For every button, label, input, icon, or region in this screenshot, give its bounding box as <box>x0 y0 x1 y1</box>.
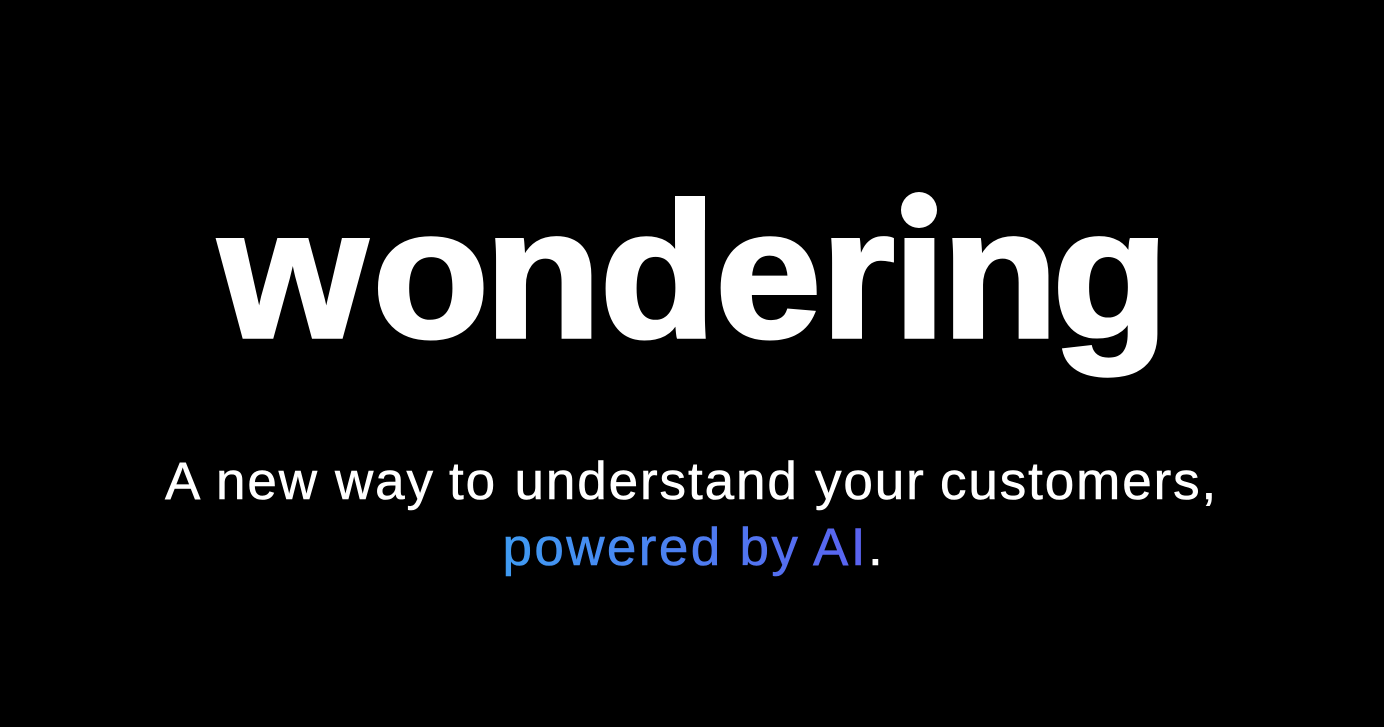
tagline line 1 <box>165 452 1218 511</box>
tagline line 1: to <box>449 452 497 511</box>
tagline line 2: AI <box>813 518 868 577</box>
tagline line 1: way <box>334 452 435 511</box>
tagline line 1: new <box>216 452 319 511</box>
tagline line 2: by <box>740 518 800 577</box>
tagline line 1: your <box>815 452 926 511</box>
tagline line 1: A <box>165 452 201 511</box>
tagline line 2 <box>502 518 885 577</box>
tagline line 1: understand <box>514 452 799 511</box>
logo wordmark: wondering <box>217 170 1169 376</box>
tagline line 1: customers, <box>940 452 1218 511</box>
tagline line 2: powered <box>502 518 723 577</box>
tagline line 2: . <box>868 518 885 577</box>
